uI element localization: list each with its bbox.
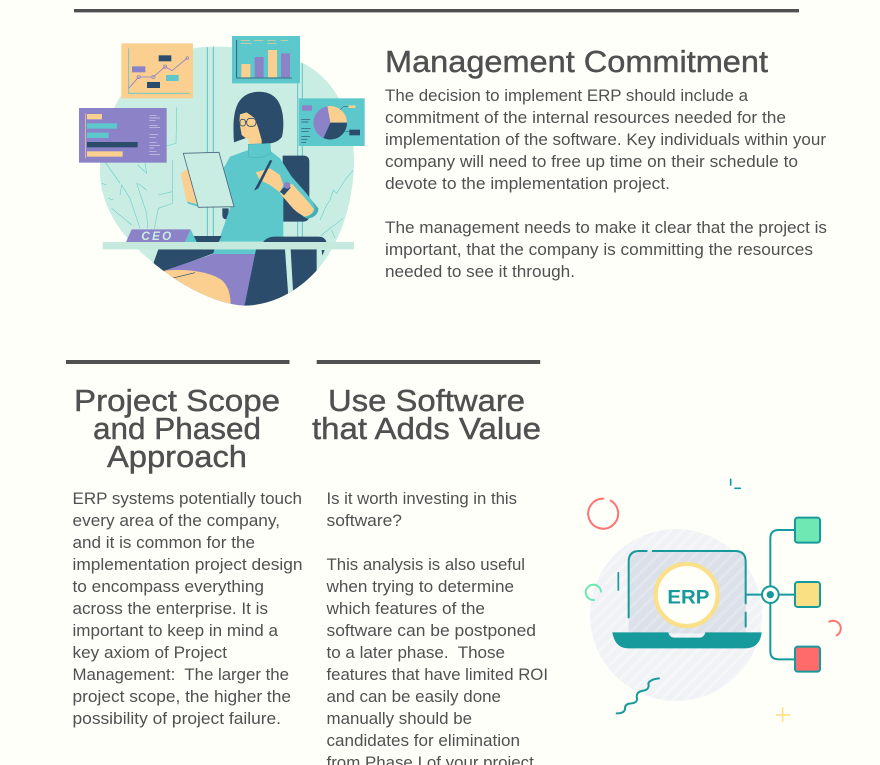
text block: use software body: software can be postponed bbox=[326, 622, 536, 640]
laptop base bbox=[612, 632, 762, 648]
text block: management commitment body: devote to the implementation project. bbox=[385, 175, 670, 193]
top divider rule bbox=[74, 9, 799, 12]
illustration: CEO with charts bbox=[79, 36, 365, 310]
left column rule bbox=[66, 360, 290, 364]
nameplate: CEO bbox=[126, 229, 197, 243]
glasses bbox=[240, 118, 256, 126]
text block: management commitment body: company will need to free up time on their schedule to bbox=[385, 153, 798, 171]
heading: Project Scope and Phased Approach: and Phased bbox=[93, 411, 261, 446]
middle column rule bbox=[317, 360, 540, 364]
connector lines bbox=[746, 530, 795, 659]
text block: use software body: when trying to determine bbox=[325, 578, 514, 596]
heading: Use Software that Adds Value: Use Software bbox=[328, 383, 525, 418]
heading: Management Commitment: Management Commitment bbox=[385, 44, 768, 79]
teal ticks bbox=[731, 479, 740, 488]
small red arc bbox=[829, 621, 841, 635]
heading: Use Software that Adds Value bbox=[312, 383, 541, 446]
text block: management commitment body: The management needs to make it clear that the project is bbox=[385, 219, 827, 237]
hub node bbox=[762, 586, 779, 603]
heading: Project Scope and Phased Approach: Project Scope bbox=[74, 383, 280, 418]
red ring bbox=[588, 499, 618, 529]
text block: project scope body: and it is common for the bbox=[72, 534, 255, 552]
green node bbox=[795, 518, 820, 543]
side tick bbox=[616, 573, 621, 590]
text block: project scope body: every area of the company, bbox=[72, 512, 280, 530]
panel: pie chart bbox=[299, 98, 365, 146]
heading: Use Software that Adds Value: that Adds Value bbox=[312, 411, 541, 446]
lower chair and skirt, clipped to blob bbox=[153, 236, 325, 310]
heading: Project Scope and Phased Approach bbox=[74, 383, 280, 474]
panel: horizontal bars bbox=[79, 108, 167, 163]
sleeve cuff bbox=[305, 202, 318, 219]
text block: use software body: manually should be bbox=[326, 710, 472, 728]
text block: use software body: Is it worth investing in this bbox=[326, 490, 517, 508]
hand bbox=[256, 168, 283, 192]
green arc bbox=[586, 585, 601, 600]
pen bbox=[254, 160, 272, 191]
text block: project scope body: key axiom of Project bbox=[72, 644, 227, 662]
clipboard bbox=[183, 152, 234, 207]
yellow node bbox=[795, 582, 820, 607]
face and neck bbox=[239, 112, 262, 146]
text block: management commitment body: important, that the company is committing the resources bbox=[385, 241, 813, 259]
text block: project scope body: across the enterprise. It is bbox=[72, 600, 268, 618]
sweater torso and sleeve bbox=[218, 150, 318, 242]
ERP badge bbox=[656, 564, 718, 626]
illustration: ERP laptop network bbox=[586, 479, 841, 721]
chair back bbox=[222, 156, 309, 222]
mint background blob bbox=[100, 47, 354, 306]
yellow plus bbox=[777, 708, 789, 721]
text block: use software body: This analysis is also useful bbox=[326, 556, 525, 574]
text block: project scope body: project scope, the higher the bbox=[72, 688, 291, 706]
text block: project scope body: implementation project design bbox=[72, 556, 302, 574]
squiggle bbox=[617, 678, 659, 713]
turtleneck bbox=[248, 143, 271, 158]
text block: project scope body: important to keep in mind a bbox=[72, 622, 279, 640]
heading: Project Scope and Phased Approach: Approach bbox=[107, 439, 247, 474]
chair arm above desk bbox=[263, 237, 327, 243]
text block: use software body bbox=[325, 490, 548, 765]
red node bbox=[795, 647, 820, 672]
text block: use software body: software? bbox=[326, 512, 402, 530]
watch bbox=[280, 183, 291, 195]
panel: bar chart bbox=[232, 36, 300, 83]
hair bbox=[233, 92, 283, 144]
ERP badge: ERP bbox=[667, 587, 709, 608]
desk top bbox=[103, 242, 354, 249]
text block: use software body: candidates for elimination bbox=[326, 732, 520, 750]
text block: management commitment body: implementation of the software. Key individuals within your bbox=[385, 131, 827, 149]
text block: project scope body: to encompass everything bbox=[72, 578, 264, 596]
nameplate: CEO: CEO bbox=[141, 230, 174, 243]
hatched grey globe bbox=[590, 529, 762, 701]
laptop screen outline bbox=[629, 551, 746, 627]
text block: management commitment body: commitment of the internal resources needed for the bbox=[385, 109, 786, 127]
text block: management commitment body bbox=[385, 87, 827, 281]
panel: line chart bbox=[121, 43, 193, 98]
laptop screen bbox=[629, 551, 746, 633]
text block: management commitment body: The decision to implement ERP should include a bbox=[385, 87, 749, 105]
forearm bbox=[280, 183, 314, 217]
text block: use software body: features that have limited ROI bbox=[326, 666, 548, 684]
text block: project scope body: possibility of project failure. bbox=[72, 710, 281, 728]
text block: use software body: which features of the bbox=[325, 600, 485, 618]
waist strip below desk bbox=[213, 249, 256, 254]
window frame lines bbox=[207, 47, 302, 237]
text block: management commitment body: needed to see it through. bbox=[385, 263, 575, 281]
plant leaves bbox=[102, 107, 353, 242]
text block: use software body: to a later phase. Those bbox=[326, 644, 505, 662]
text block: use software body: and can be easily done bbox=[326, 688, 501, 706]
left hand bbox=[181, 169, 198, 205]
text block: project scope body: Management: The larger the bbox=[72, 666, 289, 684]
text block: project scope body bbox=[72, 490, 302, 728]
text block: project scope body: ERP systems potentially touch bbox=[72, 490, 302, 508]
